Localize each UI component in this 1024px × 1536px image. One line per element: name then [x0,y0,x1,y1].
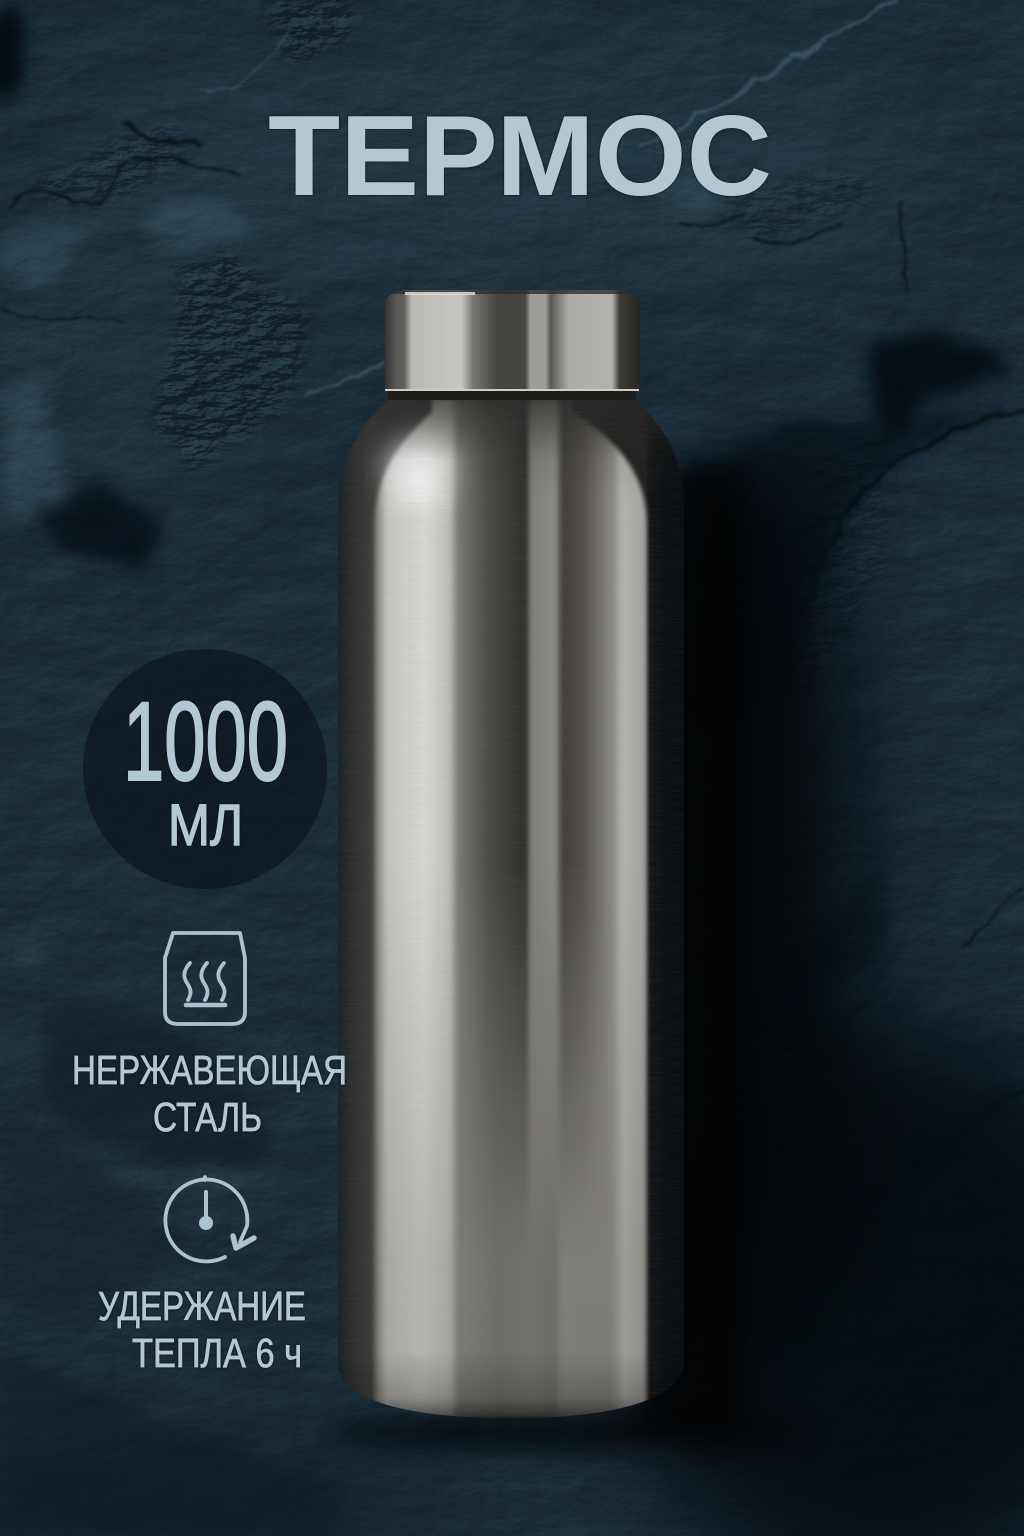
label: heat retention [98,1283,306,1376]
title: ТЕРМОС [268,93,772,220]
volume unit: МЛ [168,793,243,858]
volume number: 1000 [123,679,288,804]
lit rock faces [0,179,725,1185]
label: heat retention: ТЕПЛА 6 ч [132,1330,302,1376]
icon: container with heat waves [165,933,245,1024]
volume badge [83,649,327,889]
feature: stainless steel [72,933,347,1140]
label: heat retention: УДЕРЖАНИЕ [98,1283,306,1329]
bottle shadow [320,470,800,1450]
icon: clock with arrow [165,1177,254,1261]
bottle cap [385,290,640,391]
label: stainless steel [72,1047,347,1140]
feature: heat retention [98,1177,306,1376]
label: stainless steel: НЕРЖАВЕЮЩАЯ [72,1047,347,1093]
label: stainless steel: СТАЛЬ [153,1094,262,1140]
large dark tonal zones [0,450,1024,1536]
badge circle [83,649,327,889]
stainless steel thermos bottle [338,290,684,1418]
bottle body [338,398,684,1418]
cracks and ridges [0,0,1024,947]
bottle neck ring [388,391,636,400]
rough relief patches [33,0,891,598]
